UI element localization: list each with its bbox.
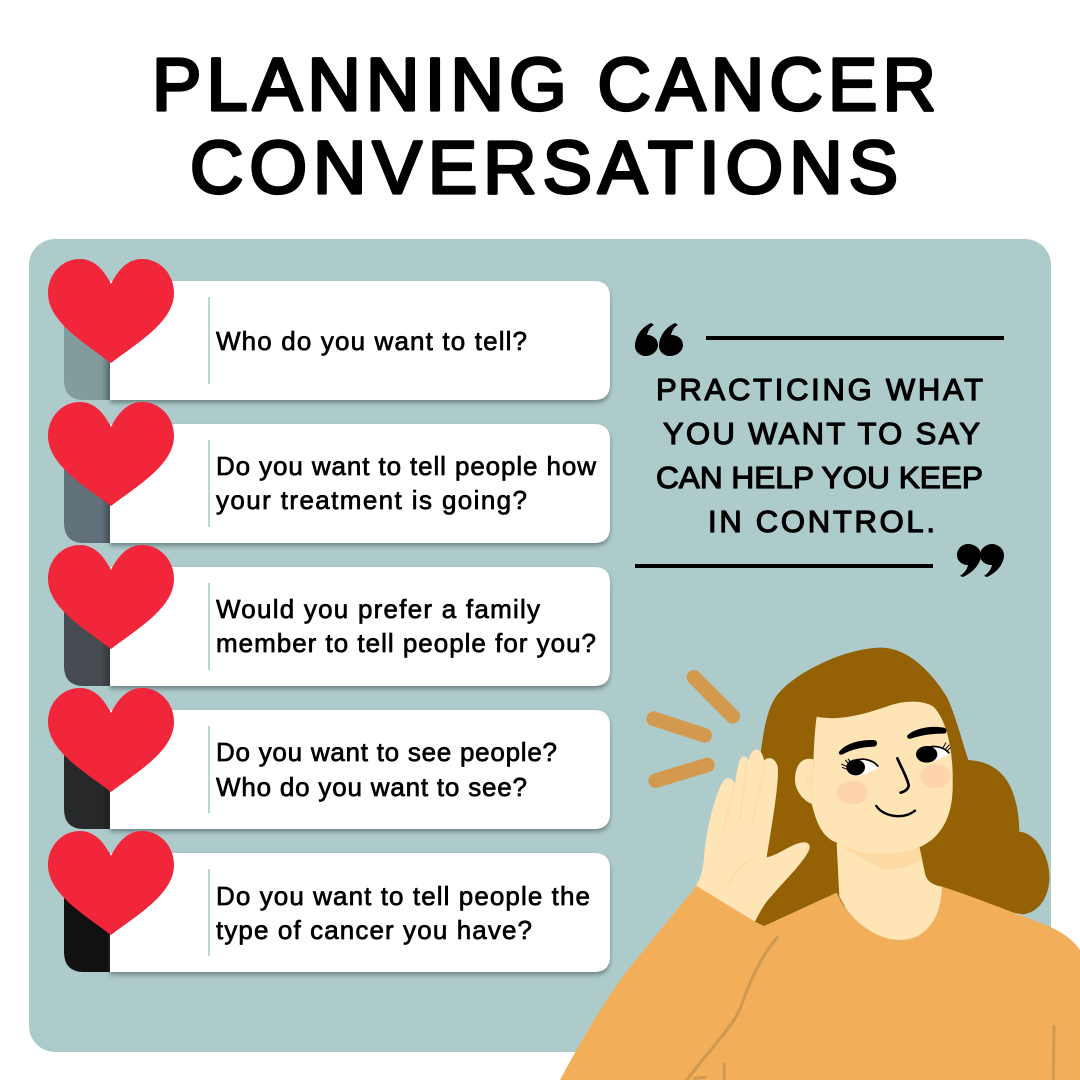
question 4 <box>48 688 610 829</box>
hair <box>753 648 1049 927</box>
question 3: member to tell people for you? <box>216 628 596 658</box>
panel: question list <box>48 259 610 972</box>
question 5: type of cancer you have? <box>216 915 532 945</box>
question 2: Do you want to tell people how <box>216 451 596 481</box>
quote text: CAN HELP YOU KEEP <box>656 460 983 495</box>
question 3 <box>48 545 610 686</box>
hand <box>696 749 810 922</box>
question 4: Do you want to see people? <box>216 737 557 767</box>
question 1 <box>48 259 610 400</box>
quote text: YOU WANT TO SAY <box>663 416 980 451</box>
title: CONVERSATIONS <box>190 126 898 209</box>
quote text: IN CONTROL. <box>708 504 935 539</box>
neck <box>837 843 942 940</box>
question 5 <box>48 831 610 972</box>
sweater <box>560 886 1080 1080</box>
illustration: woman listening <box>560 648 1080 1080</box>
icon: opening quotation marks <box>635 323 683 356</box>
question 5: Do you want to tell people the <box>216 881 590 911</box>
face <box>795 702 953 854</box>
sweater folds <box>687 937 1054 1080</box>
icon: closing quotation marks <box>957 544 1004 577</box>
quote text <box>656 372 983 539</box>
title: PLANNING CANCER <box>152 43 936 126</box>
question 2: your treatment is going? <box>216 485 527 515</box>
question 2 <box>48 402 610 543</box>
callout: quote <box>635 323 1004 577</box>
question 4: Who do you want to see? <box>216 772 527 802</box>
question 1: Who do you want to tell? <box>216 326 527 356</box>
icon: sound marks <box>654 677 733 781</box>
title <box>152 43 936 209</box>
quote text: PRACTICING WHAT <box>656 372 983 407</box>
question 3: Would you prefer a family <box>216 594 540 624</box>
panel: background <box>29 239 1051 1052</box>
